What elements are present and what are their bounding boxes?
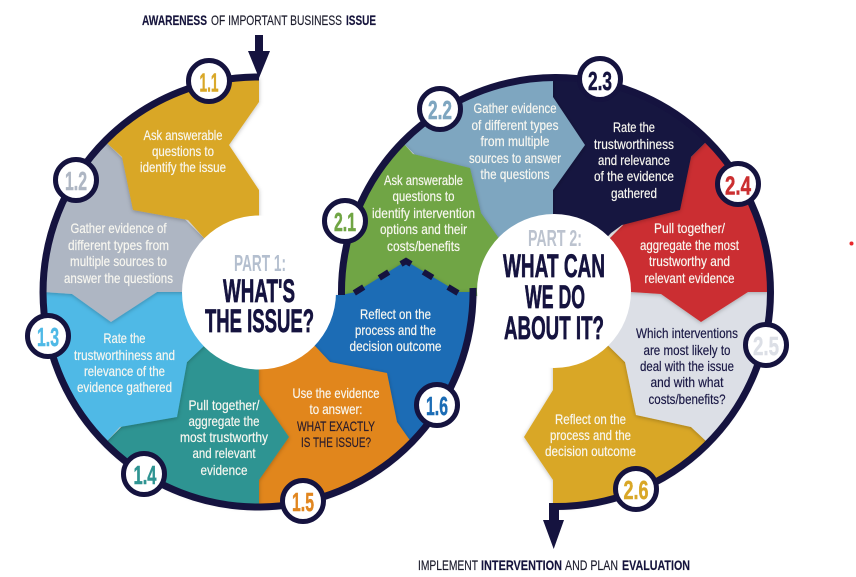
badge 2.4: 2.4: [725, 170, 751, 200]
panel 2.6: reflect on the process: Reflect on the: [555, 411, 626, 427]
footer: implement intervention and plan evaluation: IMPLEMENT: [418, 557, 478, 573]
red dot mark: [850, 242, 854, 246]
panel 1.4: pull together: aggregate the: [188, 413, 260, 429]
panel 2.5: which interventions: deal with the issue: [640, 358, 734, 374]
badge 2.6: 2.6: [624, 475, 648, 505]
panel 2.4: pull together: aggregate the most: [640, 237, 739, 253]
badge 1.6: [416, 384, 458, 426]
panel 2.1: ask answerable questions: [341, 142, 556, 296]
panel 2.1: ask answerable questions: costs/benefits: [387, 238, 460, 254]
panel 1.6: reflect on the process: process and the: [355, 322, 436, 338]
panel 2.2: gather evidence: from multiple: [480, 133, 550, 149]
footer: implement intervention and plan evaluation: EVALUATION: [622, 557, 690, 573]
badge 2.1: 2.1: [334, 207, 356, 237]
panel 2.3: rate the trustworthiness: gathered: [611, 185, 657, 201]
badge 2.1: [324, 200, 366, 242]
centre circle: part 2: WHAT CAN: [503, 248, 605, 284]
badge 1.6: 1.6: [426, 391, 448, 421]
panel 2.4: pull together: relevant evidence: [644, 270, 735, 286]
panel 2.5: which interventions: and with what: [650, 374, 724, 390]
panel 2.5: which interventions: costs/benefits?: [648, 391, 726, 407]
badge 2.2: 2.2: [428, 95, 452, 125]
panel 2.6: reflect on the process: decision outcome: [545, 443, 636, 459]
panel 2.2: gather evidence: of different types: [472, 117, 558, 133]
badge 1.1: 1.1: [200, 68, 218, 98]
badge 2.6: [616, 468, 656, 510]
centre circle: part 2: ABOUT IT?: [504, 310, 604, 346]
panel 2.4: pull together: [556, 140, 771, 322]
centre circle: part 2: WE DO: [525, 279, 585, 315]
panel 1.6: reflect on the process: [258, 261, 473, 442]
panel 1.5: use the evidence: IS THE ISSUE?: [301, 434, 371, 450]
centre circle: part 1: THE ISSUE?: [205, 303, 314, 339]
panel 2.3: rate the trustworthiness: trustworthiness: [594, 136, 674, 152]
panel 2.2: gather evidence: the questions: [480, 166, 550, 182]
badge 2.5: [746, 324, 786, 366]
panel 1.3: rate the trustworthiness: relevance of the: [84, 363, 165, 379]
footer: implement intervention and plan evaluation: [418, 557, 690, 573]
badge 1.5: [282, 480, 324, 522]
ring: left circle outline: [43, 77, 473, 507]
panel 2.4: pull together: trustworthy and: [649, 253, 730, 269]
badge 2.3: [580, 58, 620, 100]
heading: awareness of business issue: OF IMPORTANT BUSINESS: [211, 12, 342, 28]
heading: awareness of business issue: AWARENESS: [142, 12, 207, 28]
panel 1.2: gather evidence: answer the questions: [64, 270, 173, 286]
panel 2.6: reflect on the process: [524, 292, 708, 507]
panel 2.5: which interventions: Which interventions: [636, 325, 738, 341]
dashed chevron between 2.1 and 1.6: [354, 261, 458, 293]
panel 1.6: reflect on the process: Reflect on the: [360, 306, 431, 322]
footer: implement intervention and plan evaluation: INTERVENTION: [481, 557, 562, 573]
panel 2.1: ask answerable questions: Ask answerable: [384, 172, 463, 188]
ring: right circle outline: [341, 78, 770, 507]
centre circle: part 2: PART 2:: [528, 225, 582, 251]
centre circle: part 1: PART 1:: [234, 250, 286, 276]
panel 2.3: rate the trustworthiness: [553, 77, 708, 292]
badge 1.3: [28, 316, 68, 356]
panel 2.5: which interventions: are most likely to: [644, 342, 731, 358]
panel 1.5: use the evidence: to answer:: [310, 401, 362, 417]
panel 2.1: ask answerable questions: options and their: [380, 221, 467, 237]
heading: awareness of business issue: [142, 12, 376, 28]
panel 1.5: use the evidence: Use the evidence: [292, 385, 380, 401]
panel 1.4: pull together: and relevant: [192, 445, 256, 461]
panel 1.2: gather evidence: Gather evidence of: [70, 220, 167, 236]
heading: awareness of business issue: ISSUE: [346, 12, 376, 28]
panel 2.3: rate the trustworthiness: and relevance: [598, 152, 670, 168]
panel 1.2: gather evidence: [43, 142, 258, 322]
badge 1.2: [56, 160, 96, 200]
panel 1.5: use the evidence: WHAT EXACTLY: [297, 418, 375, 434]
panel 2.2: gather evidence: [402, 78, 585, 292]
panel 2.5: which interventions: [556, 292, 770, 443]
panel 1.1: ask answerable questions: identify the issue: [140, 159, 226, 175]
panel 2.6: reflect on the process: process and the: [550, 427, 631, 443]
arrow: entry from top: [248, 35, 270, 78]
panel 1.6: reflect on the process: decision outcome: [350, 338, 442, 354]
panel 1.3: rate the trustworthiness: trustworthiness and: [74, 347, 175, 363]
panel 2.3: rate the trustworthiness: of the evidence: [594, 168, 674, 184]
footer: implement intervention and plan evaluation: AND PLAN: [565, 557, 618, 573]
panel 2.2: gather evidence: sources to answer: [469, 150, 561, 166]
panel 1.3: rate the trustworthiness: [43, 292, 258, 443]
panel 1.2: gather evidence: different types from: [68, 237, 169, 253]
badge 1.3: 1.3: [37, 322, 59, 352]
badge 1.1: [188, 60, 230, 102]
panel 1.4: pull together: [105, 292, 289, 507]
panel 1.1: ask answerable questions: Ask answerable: [144, 127, 223, 143]
panel 2.2: gather evidence: Gather evidence: [474, 100, 557, 116]
panel 1.1: ask answerable questions: questions to: [152, 143, 214, 159]
panel 1.4: pull together: evidence: [200, 462, 248, 478]
panel 1.3: rate the trustworthiness: Rate the: [104, 330, 146, 346]
panel 2.3: rate the trustworthiness: Rate the: [613, 119, 655, 135]
centre circle: part 2: [477, 214, 631, 368]
badge 1.2: 1.2: [65, 166, 87, 196]
badge 2.3: 2.3: [588, 66, 612, 96]
panel 1.1: ask answerable questions: [106, 77, 259, 292]
panel 1.5: use the evidence: [258, 292, 412, 507]
panel 1.4: pull together: most trustworthy: [180, 429, 268, 445]
panel 1.2: gather evidence: multiple sources to: [70, 253, 167, 269]
badge 2.2: [420, 88, 460, 130]
panel 2.1: ask answerable questions: identify intervention: [372, 205, 475, 221]
panel 2.4: pull together: Pull together/: [654, 220, 725, 236]
centre circle: part 1: WHAT'S: [223, 273, 295, 309]
badge 2.5: 2.5: [753, 331, 779, 361]
panel 1.4: pull together: Pull together/: [188, 397, 260, 413]
panel 1.3: rate the trustworthiness: evidence gathered: [77, 379, 172, 395]
badge 1.4: [124, 454, 164, 494]
centre circle: part 1: [182, 216, 336, 370]
arrow: exit at bottom: [543, 503, 564, 549]
panel 2.1: ask answerable questions: questions to: [392, 188, 455, 204]
badge 2.4: [718, 164, 758, 204]
badge 1.4: 1.4: [134, 460, 157, 490]
badge 1.5: 1.5: [292, 487, 314, 517]
